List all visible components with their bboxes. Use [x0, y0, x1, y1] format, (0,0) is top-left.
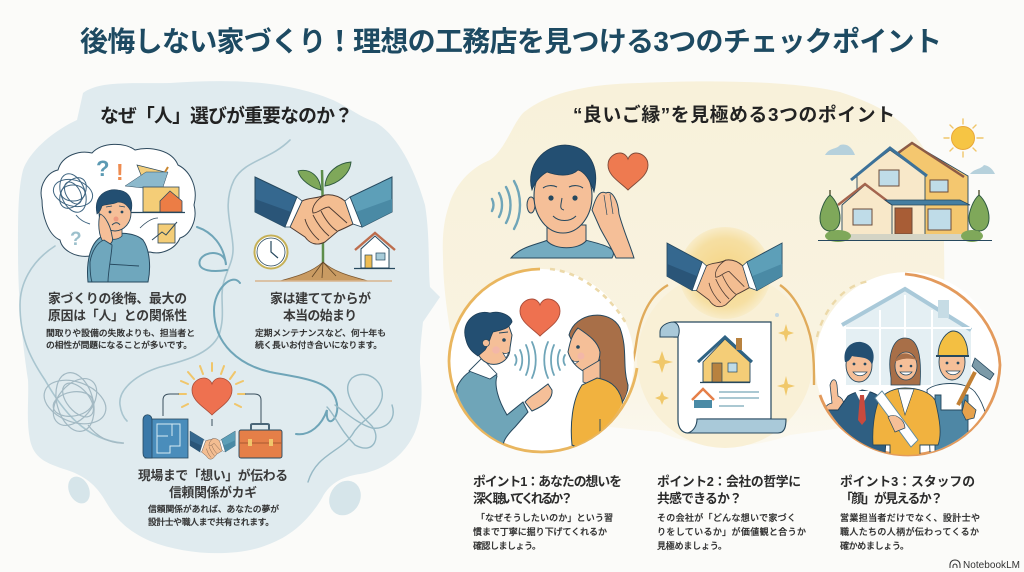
icon: handshake with sprout, clock and house — [254, 162, 395, 281]
text: card 2: 続く長いお付き合いになります。 — [255, 339, 382, 350]
glass house background — [842, 289, 971, 385]
circle 3: staff faces — [815, 272, 1000, 456]
point 3 text: 職人たちの人柄が伝わってくるか — [840, 526, 979, 537]
point 1 text: 深く聴いてくれるか？ — [473, 491, 573, 506]
man speaking — [457, 312, 552, 452]
woman — [568, 315, 628, 452]
text: card 3: 信頼関係がカギ — [169, 485, 257, 500]
point 2 text: ポイント2：会社の哲学に — [657, 474, 801, 489]
panel background blob — [18, 81, 440, 553]
heading: three points: “良いご縁”を見極める3つのポイント — [573, 103, 895, 125]
icon: heart, blueprint, handshake, toolbox — [143, 363, 282, 459]
text: card 2 — [255, 291, 386, 350]
icon: worried person in thought cloud: ? — [70, 229, 82, 250]
text: card 2: 家は建ててからが — [270, 291, 371, 306]
circle 1: listening — [449, 269, 637, 453]
point 3 text: 「顔」が見えるか？ — [840, 491, 943, 506]
icon: worried person in thought cloud — [41, 144, 195, 282]
point 1 text: 「なぜそうしたいのか」という習 — [476, 513, 613, 523]
point 2 text — [657, 474, 806, 551]
heart between — [520, 299, 560, 336]
logo: NotebookLM: NotebookLM — [963, 560, 1020, 571]
scribble tangle — [38, 368, 124, 443]
point 2 text: その会社が「どんな想いで家づく — [657, 512, 796, 523]
text: card 3 — [138, 468, 288, 527]
sparkles — [651, 324, 795, 405]
point 1 text: ポイント1：あなたの想いを — [473, 474, 622, 489]
point 3 text: 営業担当者だけでなく、設計士や — [840, 512, 980, 523]
point 2 text: りをしているか」が価値観と合うか — [657, 526, 806, 537]
point 1 text: 慣まで丁寧に掘り下げてくれるか — [473, 526, 607, 537]
text: card 1 — [46, 291, 195, 350]
point 1 text: 確認しましょう。 — [473, 540, 541, 551]
worker — [927, 331, 994, 456]
woman with roll — [873, 338, 940, 456]
circle 2: shared philosophy — [622, 227, 814, 448]
text: card 1: 原因は「人」との関係性 — [48, 308, 187, 323]
panel background blob — [443, 81, 944, 446]
salesperson — [823, 342, 888, 455]
point 3 text: 確かめましょう。 — [840, 540, 909, 551]
decorative blob right — [323, 475, 367, 521]
text: card 2: 定期メンテナンスなど、何十年も — [255, 327, 386, 338]
point 2 text: 見極めましょう。 — [657, 540, 727, 551]
text: card 3: 信頼関係があれば、あなたの夢が — [148, 503, 279, 514]
point 1 text — [473, 474, 622, 551]
text: card 1: 家づくりの後悔、最大の — [48, 291, 187, 306]
icon: worried person in thought cloud: ? — [96, 156, 109, 181]
icon: house with sun and clouds — [818, 119, 995, 242]
decorative blob left — [64, 473, 94, 507]
point 3 text — [840, 474, 980, 551]
sound waves — [515, 342, 565, 378]
text: card 2: 本当の始まり — [283, 308, 357, 323]
text: card 1: の相性が問題になることが多いです。 — [46, 339, 192, 350]
text: card 1: 間取りや設備の失敗よりも、担当者と — [46, 327, 195, 338]
panel: three points — [443, 81, 1000, 551]
text: card 3: 現場まで「想い」が伝わる — [138, 468, 288, 483]
heading: why people: なぜ「人」選びが重要なのか？ — [100, 104, 353, 126]
title: 後悔しない家づくり！理想の工務店を見つける3つのチェックポイント — [80, 26, 942, 57]
icon: scroll document — [660, 322, 786, 433]
panel: why people matter — [18, 81, 440, 553]
point 2 text: 共感できるか？ — [657, 491, 742, 506]
icon: listening man — [492, 145, 648, 258]
text: card 3: 設計士や職人まで共有されます。 — [148, 516, 274, 527]
icon: worried person in thought cloud: ! — [116, 159, 124, 185]
flowing lines — [20, 140, 393, 482]
point 3 text: ポイント3：スタッフの — [840, 474, 975, 489]
